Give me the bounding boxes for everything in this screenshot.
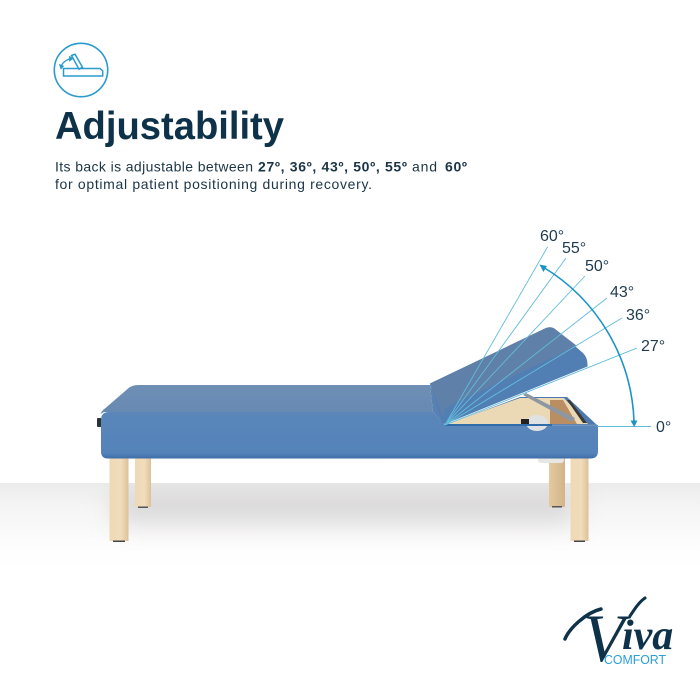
- arc arrow from 0 to 60 degrees: [540, 264, 638, 427]
- description text: 60º: [445, 158, 467, 174]
- brand logo: iva: [622, 613, 673, 659]
- back legs: [135, 456, 565, 507]
- description text: [55, 158, 467, 192]
- tag: [97, 418, 102, 427]
- angle labels: 27°: [641, 338, 665, 355]
- angle labels: [540, 228, 671, 436]
- angle labels: 60°: [540, 228, 564, 245]
- description text: and: [412, 158, 437, 174]
- angle labels: 36°: [626, 307, 650, 324]
- front legs: [110, 458, 588, 542]
- raised backrest: [430, 327, 588, 424]
- description text: 27º, 36º, 43º, 50º, 55º: [258, 158, 407, 174]
- angle guide lines: [445, 247, 651, 426]
- angle labels: 50°: [585, 258, 609, 275]
- brand logo: V: [583, 600, 632, 676]
- floor background: [0, 483, 700, 538]
- table body front: [101, 412, 598, 458]
- title: Adjustability: [55, 105, 284, 148]
- icon: adjustable table in circle: [54, 43, 108, 97]
- seat cushion top: [100, 385, 433, 414]
- angle labels: 55°: [562, 240, 586, 257]
- brand logo: [565, 598, 673, 676]
- open frame and mechanism: [445, 393, 597, 431]
- angle labels: 0°: [656, 419, 671, 436]
- treatment table: [97, 327, 598, 542]
- brand logo: COMFORT: [604, 652, 666, 667]
- description text: for optimal patient positioning during recovery.: [55, 176, 372, 192]
- angle labels: 43°: [610, 284, 634, 301]
- description text: Its back is adjustable between: [55, 158, 253, 174]
